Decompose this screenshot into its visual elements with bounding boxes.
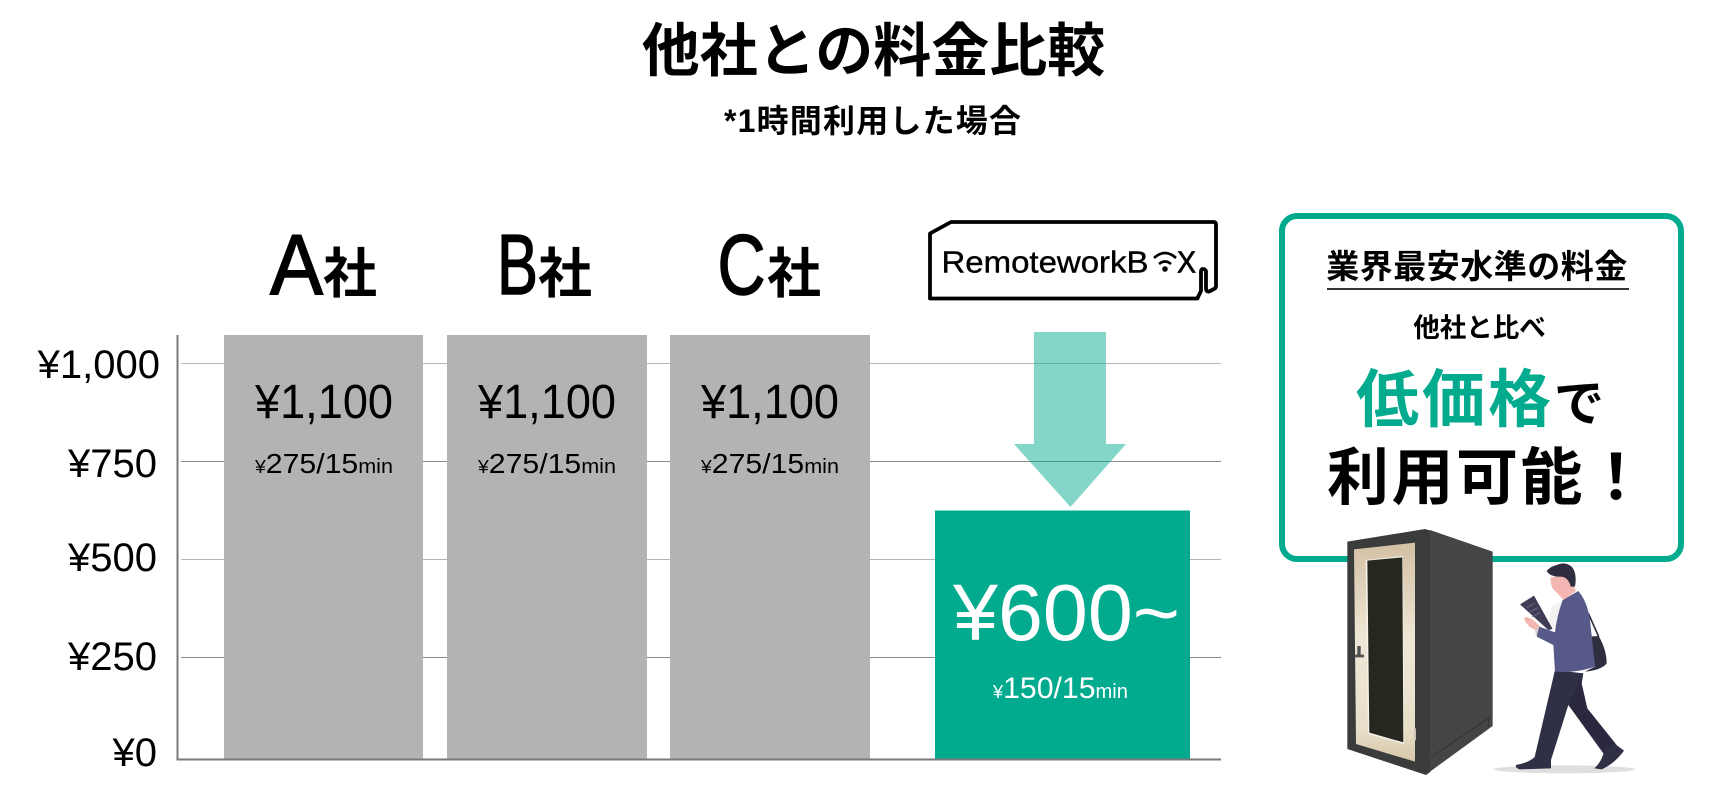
column heading: A社 bbox=[270, 218, 377, 313]
bar: B社: ¥275/15 min bbox=[477, 448, 616, 479]
column heading: B社: B bbox=[497, 218, 538, 313]
bar: RemoteworkBOX: ¥150/15min bbox=[992, 672, 1128, 705]
axes bbox=[178, 335, 1221, 760]
bar: RemoteworkBOX bbox=[935, 510, 1190, 760]
highlight: low price: 低価格 bbox=[1356, 366, 1554, 436]
y axis labels: ¥500 bbox=[67, 536, 157, 580]
panel: lowest price callout bbox=[1282, 216, 1681, 559]
column heading: C社: C bbox=[718, 218, 766, 313]
bar: B社 bbox=[447, 335, 647, 759]
illustration: person bbox=[1494, 563, 1635, 773]
bar: A社 bbox=[224, 335, 423, 759]
grid lines bbox=[181, 364, 1221, 658]
bar: C社: ¥275/15 min bbox=[700, 448, 839, 479]
column heading: B社 bbox=[497, 218, 592, 313]
title: 他社との料金比較 bbox=[642, 19, 1105, 84]
bar: B社: ¥1,100 bbox=[477, 376, 616, 429]
subtitle: *1時間利用した場合 bbox=[724, 103, 1021, 139]
y axis labels: ¥250 bbox=[67, 635, 157, 679]
bar: C社 bbox=[670, 335, 870, 759]
logo: RemoteworkBOX: RemoteworkB bbox=[942, 244, 1148, 280]
highlight: low price: で bbox=[1554, 376, 1604, 432]
column heading: C社 bbox=[718, 218, 821, 313]
column heading: C社: 社 bbox=[767, 244, 821, 304]
y axis labels: ¥750 bbox=[67, 442, 157, 486]
column heading: B社: 社 bbox=[538, 244, 592, 304]
panel subheading: 他社と比べ bbox=[1413, 313, 1546, 343]
bar chart bbox=[37, 335, 1221, 775]
bar: A社: ¥1,100 bbox=[254, 376, 393, 429]
y axis labels: ¥1,000 bbox=[37, 343, 160, 387]
logo: RemoteworkBOX bbox=[930, 222, 1216, 298]
bar: A社: ¥275/15 min bbox=[254, 448, 393, 479]
panel message: 利用可能！ bbox=[1327, 444, 1650, 513]
column heading: A社: 社 bbox=[323, 244, 377, 304]
bar: C社: ¥1,100 bbox=[700, 376, 839, 429]
logo: RemoteworkBOX: X bbox=[1177, 244, 1196, 280]
arrow: down to lower price bbox=[1014, 332, 1126, 507]
icon: wifi bbox=[1154, 253, 1176, 270]
bar: RemoteworkBOX: ¥600~ bbox=[952, 568, 1180, 657]
illustration: booth bbox=[1347, 529, 1493, 775]
y axis labels: ¥0 bbox=[112, 731, 157, 775]
y axis labels bbox=[37, 343, 160, 775]
column heading: A社: A bbox=[270, 218, 323, 313]
panel heading: 業界最安水準の料金 bbox=[1326, 248, 1628, 285]
